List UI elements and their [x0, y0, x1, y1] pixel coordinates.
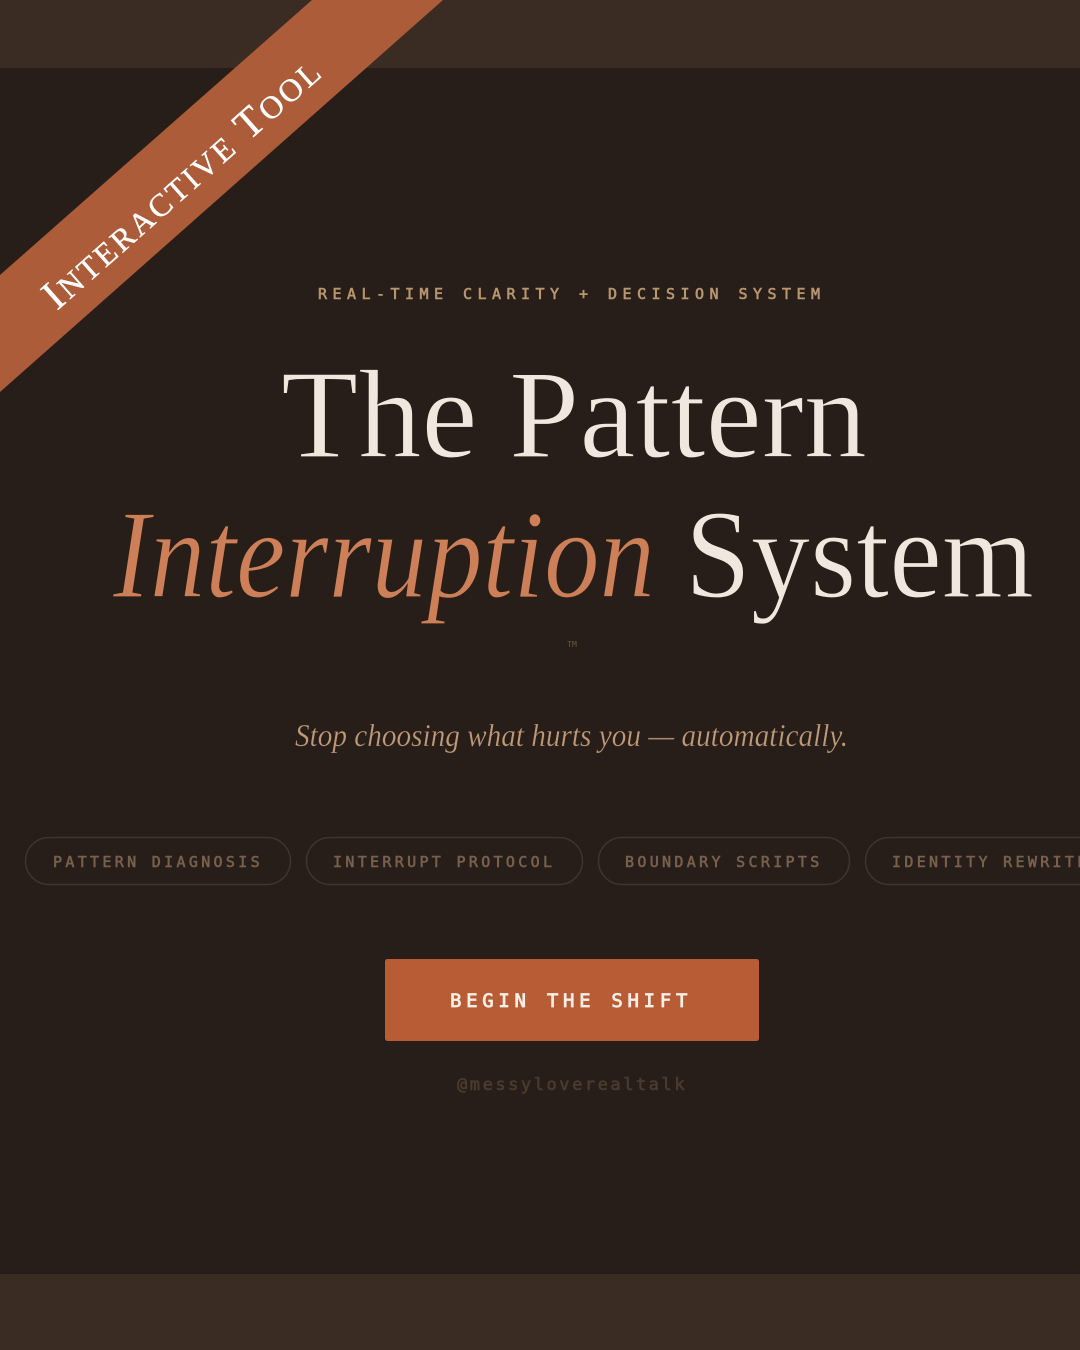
- call to action button: [385, 959, 759, 1041]
- corner ribbon: interactive tool: [0, 0, 443, 392]
- subtitle: Stop choosing what hurts you — automatically.: [295, 717, 848, 753]
- call to action button: BEGIN THE SHIFT: [450, 990, 692, 1012]
- pill: pattern diagnosis: [26, 838, 290, 884]
- pill: boundary scripts: BOUNDARY SCRIPTS: [625, 853, 823, 871]
- eyebrow text: REAL-TIME CLARITY + DECISION SYSTEM: [318, 285, 826, 303]
- corner ribbon: interactive tool: INTERACTIVE TOOL: [33, 47, 331, 318]
- title: [112, 346, 1034, 625]
- trademark mark: TM: [567, 640, 577, 649]
- pill: boundary scripts: [598, 838, 850, 884]
- title line one: The Pattern: [281, 346, 867, 485]
- title line two: system: System: [685, 486, 1034, 625]
- pill: interrupt protocol: INTERRUPT PROTOCOL: [333, 853, 555, 871]
- pill: pattern diagnosis: PATTERN DIAGNOSIS: [53, 853, 263, 871]
- pill: interrupt protocol: [306, 838, 582, 884]
- bottom band: [0, 1274, 1080, 1350]
- feature pills: [26, 838, 1080, 884]
- pill: identity rewrite: [866, 838, 1080, 884]
- title line two: interruption: Interruption: [112, 486, 655, 625]
- top band: [0, 0, 1080, 68]
- social handle: @messyloverealtalk: [457, 1075, 687, 1095]
